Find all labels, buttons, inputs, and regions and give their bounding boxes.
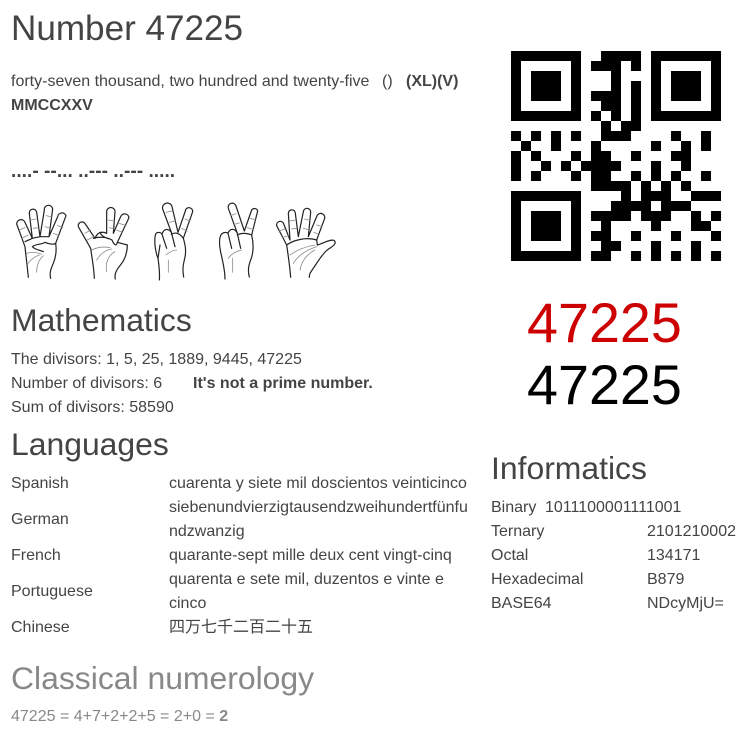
big number: black: 47225 <box>527 354 682 416</box>
row: Binary: 1011100001111001 <box>545 499 681 516</box>
QR code <box>511 51 721 261</box>
row: Spanish: Spanish <box>11 475 69 492</box>
row: Octal: 134171 <box>647 547 700 564</box>
number in words: forty-seven thousand, two hundred and twenty-five <box>11 73 369 90</box>
row: German: ndzwanzig <box>169 523 245 540</box>
row: French: French <box>11 547 61 564</box>
panel: languages table <box>11 475 468 636</box>
row: Ternary: 2101210002 <box>647 523 736 540</box>
row: German: German <box>11 511 69 528</box>
row: Chinese <box>11 618 313 636</box>
prime status: It's not a prime number. <box>193 375 373 392</box>
numerology calculation: 47225 = 4+7+2+2+5 = 2+0 = 2 <box>11 708 228 725</box>
hand: digit 2 <box>220 203 258 279</box>
roman numeral: MMCCXXV <box>11 97 93 114</box>
row: BASE64 <box>491 595 724 612</box>
heading: Classical numerology: Classical numerology <box>11 660 314 696</box>
morse code: ....- --... ..--- ..--- ..... <box>11 161 175 182</box>
row: BASE64: BASE64 <box>491 595 551 612</box>
row: Hexadecimal <box>491 571 684 588</box>
heading: Informatics: Informatics <box>491 450 647 486</box>
row: French <box>11 547 452 564</box>
divisor count: Number of divisors: 6 <box>11 375 162 392</box>
row: Binary: Binary <box>491 499 536 516</box>
row: Chinese: 四万七千二百二十五 <box>169 619 313 636</box>
row: Octal: Octal <box>491 547 528 564</box>
row: Ternary: Ternary <box>491 523 544 540</box>
divisors list: The divisors: 1, 5, 25, 1889, 9445, 47225 <box>11 351 302 368</box>
title: Number 47225 <box>11 9 243 48</box>
row: Spanish <box>11 475 467 492</box>
big number: red: 47225 <box>527 292 682 354</box>
hand: digit 4 <box>17 205 66 278</box>
hand: digit 7 <box>78 208 129 279</box>
row: Portuguese: Portuguese <box>11 583 93 600</box>
row: Hexadecimal: B879 <box>647 571 684 588</box>
row: Portuguese <box>11 571 444 612</box>
number in words: (XL)(V) <box>406 73 458 90</box>
hand: digit 2 <box>155 203 193 280</box>
number in words: () <box>382 73 393 90</box>
row: BASE64: NDcyMjU= <box>647 595 724 612</box>
heading: Mathematics: Mathematics <box>11 302 192 338</box>
hand: digit 5 <box>277 208 335 277</box>
divisor sum: Sum of divisors: 58590 <box>11 399 174 416</box>
row: Portuguese: cinco <box>169 595 206 612</box>
row: Chinese: Chinese <box>11 619 70 636</box>
row: Spanish: cuarenta y siete mil doscientos veinticinco <box>169 475 467 492</box>
row: Ternary <box>491 523 736 540</box>
panel: informatics table <box>491 499 736 612</box>
row: German <box>11 499 468 540</box>
icon: sign language hands <box>16 202 336 281</box>
row: German: siebenundvierzigtausendzweihundertfünfu <box>169 499 468 516</box>
row: Portuguese: quarenta e sete mil, duzentos e vinte e <box>169 571 444 588</box>
row: Hexadecimal: Hexadecimal <box>491 571 583 588</box>
row: French: quarante-sept mille deux cent vingt-cinq <box>169 547 452 564</box>
panel: mathematics facts <box>11 351 373 416</box>
row: Octal <box>491 547 700 564</box>
heading: Languages: Languages <box>11 426 169 462</box>
